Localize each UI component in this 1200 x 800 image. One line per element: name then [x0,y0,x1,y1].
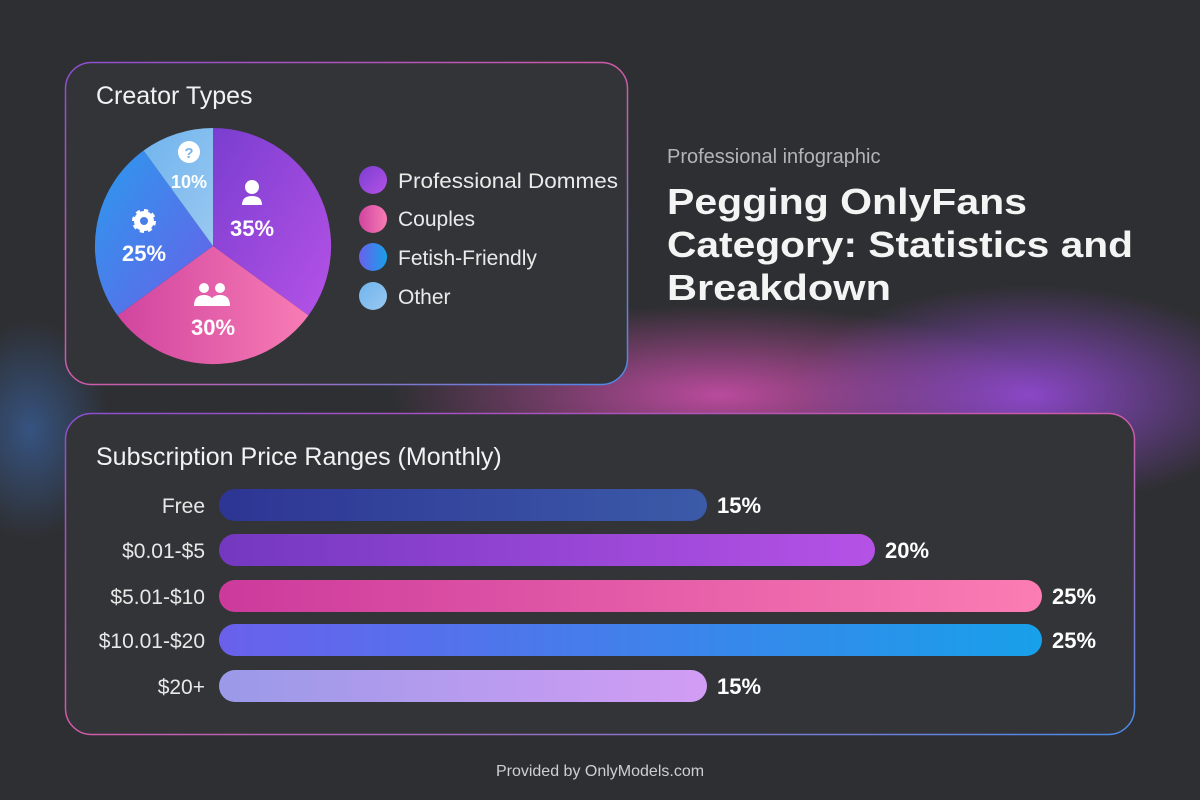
pie chart [95,128,331,364]
pie chart: 30% [191,315,235,340]
bar chart: 25% [1052,628,1096,653]
legend: Couples [398,208,475,231]
panel: subscription price ranges [66,414,1134,734]
icon: question: ? [184,145,194,162]
bar chart: Free [162,495,205,518]
icon: gear [134,211,154,231]
pie chart: 35% [230,216,274,241]
panel: creator types [66,62,628,384]
heading: creator types: Creator Types [96,82,253,110]
legend: Other [398,286,451,309]
icon: question [178,141,200,163]
bar chart: $10.01-$20 [99,630,205,653]
subtitle: Professional infographic [667,146,880,168]
bar chart: 15% [717,493,761,518]
heading: price ranges: Subscription Price Ranges (Monthly) [96,443,502,471]
bar chart: $5.01-$10 [110,586,205,609]
title: Breakdown [667,267,891,308]
title: Pegging OnlyFans [667,181,1027,222]
legend: Fetish-Friendly [398,247,537,270]
title: Category: Statistics and [667,224,1133,265]
legend [359,166,618,310]
pie chart: 25% [122,241,166,266]
icon: couple [194,283,230,306]
bar chart: $0.01-$5 [122,540,205,563]
icon: woman [242,180,262,205]
bar chart [99,489,1096,702]
bar chart: 20% [885,538,929,563]
bar chart: $20+ [158,676,205,699]
title [667,181,1133,308]
footer: Provided by OnlyModels.com [496,763,704,780]
legend: Professional Dommes [398,170,618,193]
bar chart: 15% [717,674,761,699]
pie chart: 10% [171,172,207,192]
bar chart: 25% [1052,584,1096,609]
